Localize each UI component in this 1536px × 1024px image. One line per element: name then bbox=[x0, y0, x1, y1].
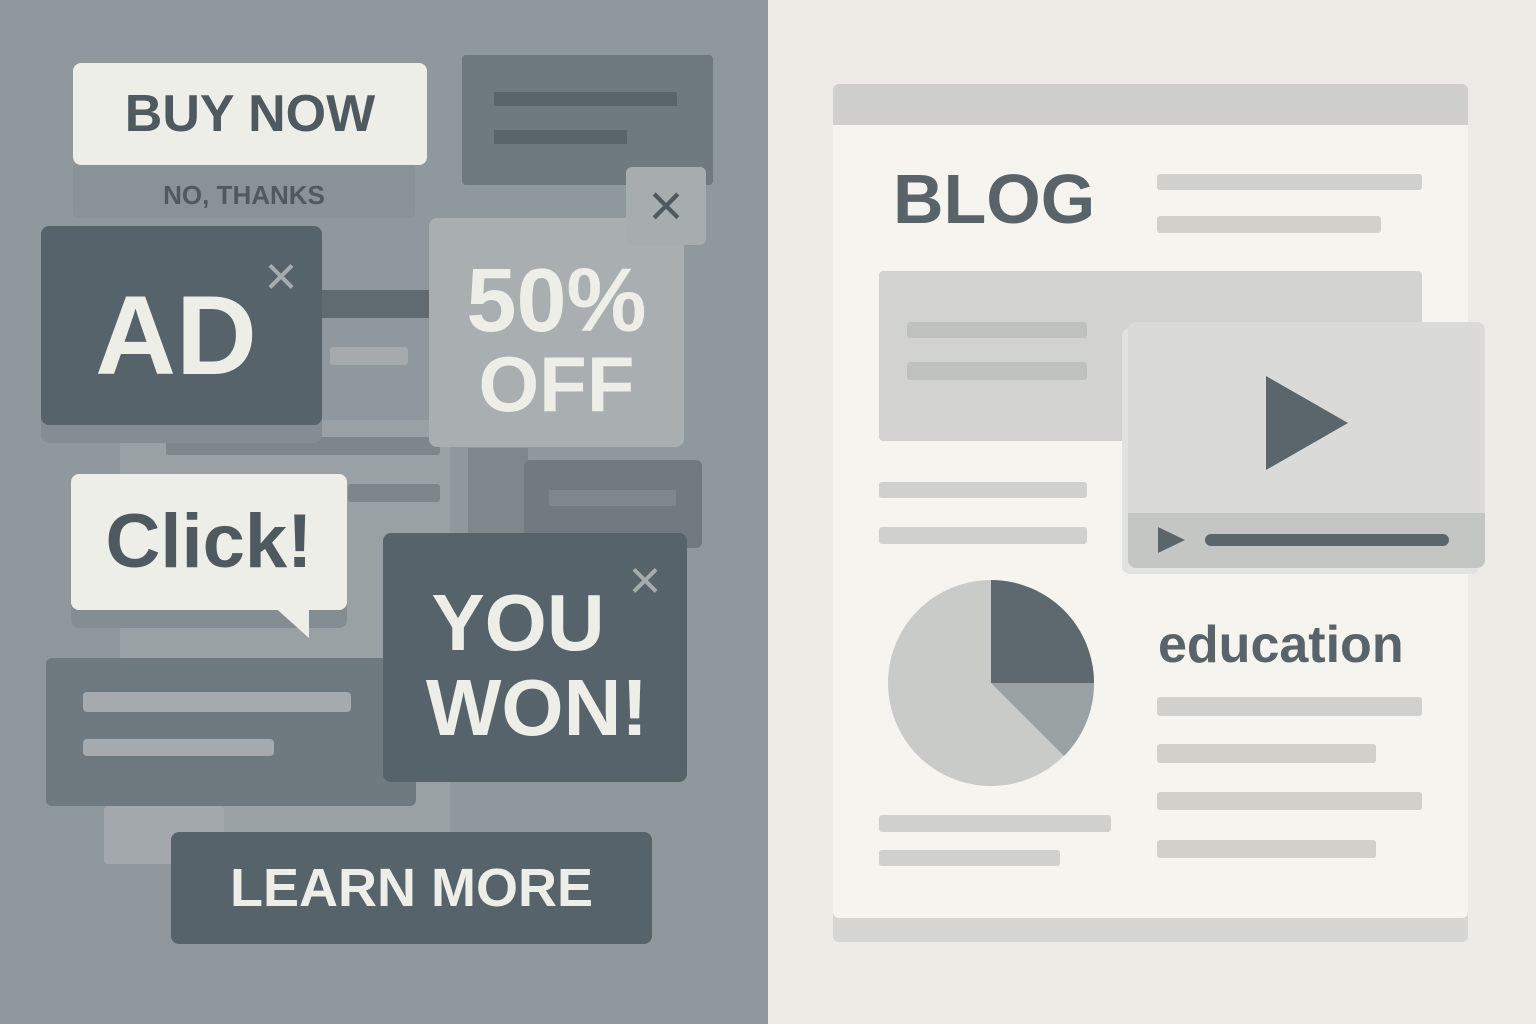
bottom left ad box bbox=[46, 658, 416, 806]
image block bbox=[879, 271, 1422, 441]
click bubble: Click! bbox=[106, 499, 312, 584]
panel: left ad chaos bbox=[0, 0, 768, 1024]
pie chart bbox=[888, 580, 1094, 786]
panel: blog page bbox=[833, 84, 1468, 918]
YOU WON popup: WON! bbox=[426, 663, 648, 752]
50% OFF popup: 50% bbox=[466, 251, 647, 351]
50% OFF popup bbox=[429, 218, 684, 447]
click bubble bbox=[71, 474, 347, 610]
no thanks strip: NO, THANKS bbox=[163, 180, 325, 210]
icon: close button: × bbox=[648, 172, 684, 239]
50% OFF popup: OFF bbox=[479, 340, 634, 428]
buy now button: BUY NOW bbox=[125, 85, 375, 143]
small ad box bbox=[524, 460, 702, 548]
background bars bbox=[120, 420, 450, 840]
learn more button: LEARN MORE bbox=[230, 858, 593, 918]
top right ad box bbox=[462, 55, 713, 185]
icon: close x: × bbox=[265, 244, 297, 307]
header bar bbox=[833, 84, 1468, 125]
no thanks strip bbox=[73, 160, 415, 218]
YOU WON popup: YOU bbox=[431, 578, 605, 667]
buy now button bbox=[73, 63, 427, 165]
AD popup bbox=[41, 226, 322, 425]
controls bar bbox=[1128, 513, 1485, 568]
icon: close button bbox=[626, 167, 706, 245]
AD popup: AD bbox=[95, 273, 257, 398]
BLOG title: BLOG bbox=[893, 160, 1095, 238]
icon: play bbox=[1266, 376, 1348, 470]
YOU WON popup bbox=[383, 533, 687, 782]
learn more button bbox=[171, 832, 652, 944]
icon: close x: × bbox=[629, 548, 661, 611]
video player bbox=[1128, 322, 1485, 568]
education heading: education bbox=[1158, 616, 1404, 674]
